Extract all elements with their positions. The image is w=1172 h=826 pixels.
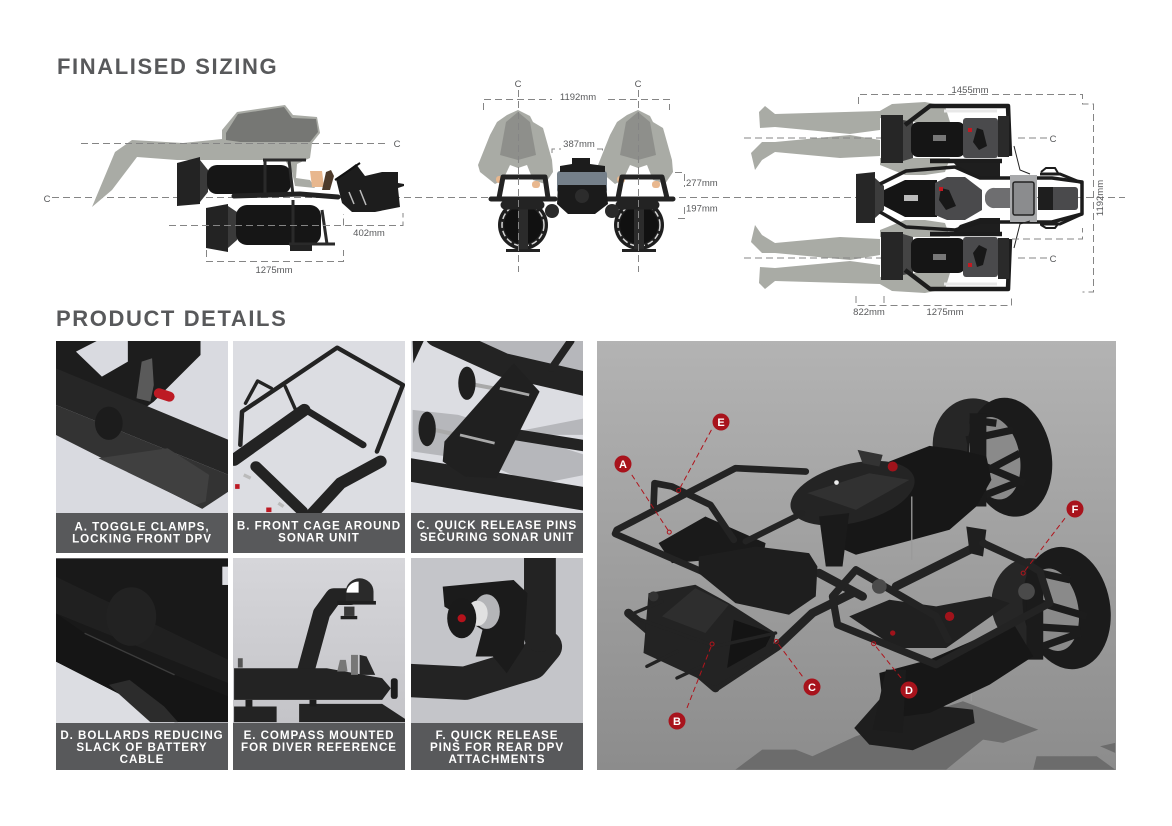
marker C: C <box>808 682 816 694</box>
photo: quick release pins <box>410 335 590 500</box>
dimensions: top view: C <box>1050 134 1057 145</box>
machinery inside rear frame <box>849 596 1010 648</box>
dimensions: side view: 402mm <box>353 228 385 239</box>
upper thruster and diver, top <box>751 102 1010 177</box>
foot plate <box>854 700 975 750</box>
leader lines <box>632 430 1065 708</box>
panel F: rear pins <box>410 557 583 770</box>
rear thruster, lower <box>992 546 1111 670</box>
dimensions: side view <box>44 139 403 276</box>
dimensions: top view: 1275mm <box>927 307 964 318</box>
caption: B. FRONT CAGE AROUND <box>237 520 401 532</box>
marker F <box>1066 500 1084 518</box>
sonar unit, top <box>1010 168 1082 228</box>
caption: SONAR UNIT <box>278 532 360 544</box>
machinery inside front frame <box>659 516 766 563</box>
photo: front cage <box>234 348 403 513</box>
heading: product details: PRODUCT DETAILS <box>56 306 287 331</box>
caption <box>411 723 583 770</box>
left thruster, front <box>498 200 548 252</box>
lower pylon <box>879 670 892 700</box>
main panel: product render <box>597 341 1120 770</box>
hands <box>496 176 660 188</box>
dimensions: front view: 277mm <box>686 178 718 189</box>
marker B: B <box>673 716 681 728</box>
frames, front <box>491 177 673 199</box>
dimensions: top view: 1455mm <box>952 85 989 96</box>
product render drawing <box>615 391 1120 770</box>
caption: E. COMPASS MOUNTED <box>244 729 394 742</box>
frame tube, side <box>234 194 338 197</box>
caption <box>233 513 405 553</box>
caption: FOR DIVER REFERENCE <box>241 741 397 754</box>
dimensions: side view: 1275mm <box>256 265 293 276</box>
side view drawing <box>92 105 404 252</box>
caption: C. QUICK RELEASE PINS <box>417 519 577 532</box>
marker E: E <box>717 417 725 429</box>
dimensions: front view: C <box>515 79 522 90</box>
hand <box>310 171 324 187</box>
top view drawing <box>751 102 1082 293</box>
caption: SECURING SONAR UNIT <box>420 531 574 544</box>
caption <box>233 723 405 770</box>
sonar unit, side <box>335 163 404 212</box>
caption <box>411 513 583 553</box>
caption <box>56 723 228 770</box>
dimensions: front view: 387mm <box>563 139 595 150</box>
dimension line: global centre line C <box>52 196 1125 198</box>
dimensions: front view: 1192mm <box>560 92 596 103</box>
photo: bollard <box>56 558 229 722</box>
centre white bay <box>982 180 1010 216</box>
panel C: quick release pins <box>410 335 590 553</box>
dimensions: top view: C <box>1050 254 1057 265</box>
dimensions: front view: 197mm <box>686 204 718 214</box>
marker F: F <box>1072 504 1079 516</box>
panel A: toggle clamps <box>56 341 229 553</box>
marker D <box>900 682 918 698</box>
caption: ATTACHMENTS <box>449 753 545 766</box>
diver silhouette, side <box>92 105 320 207</box>
plate, upper thruster <box>790 450 914 525</box>
heading: finalised sizing: FINALISED SIZING <box>57 54 278 79</box>
diver details, front <box>500 112 656 160</box>
photo: rear pins <box>410 557 545 683</box>
marker D: D <box>905 685 913 697</box>
cables <box>1014 146 1030 248</box>
diver tank, side <box>226 107 318 142</box>
caption: SLACK OF BATTERY <box>76 741 208 754</box>
sonar unit, front <box>545 158 619 218</box>
marker B <box>668 712 686 730</box>
dimensions: side view: C <box>394 139 401 150</box>
rear thruster, upper <box>932 398 1052 517</box>
dimensions: side view: C <box>44 194 51 205</box>
marker A: A <box>619 459 627 471</box>
ground shadow <box>735 701 1115 770</box>
dimensions: front view <box>484 79 718 272</box>
panel D: bollards <box>56 558 229 770</box>
divers, front <box>478 110 673 184</box>
marker E <box>712 414 730 430</box>
caption: CABLE <box>120 753 164 766</box>
caption: A. TOGGLE CLAMPS, <box>74 520 210 534</box>
caption: F. QUICK RELEASE <box>436 729 558 742</box>
sonar unit <box>630 585 776 686</box>
centre thruster, top <box>856 167 1082 230</box>
dimensions: top view: 822mm <box>853 307 885 318</box>
right thruster, front <box>614 200 664 252</box>
panel B: front cage <box>233 341 405 553</box>
caption: PINS FOR REAR DPV <box>430 741 564 754</box>
lower frame tubes <box>832 543 1050 665</box>
front view drawing <box>478 110 673 252</box>
body, lower thruster <box>879 626 1028 706</box>
support rod <box>911 496 912 540</box>
marker A <box>614 456 632 472</box>
photo: toggle clamp <box>56 341 229 509</box>
caption: D. BOLLARDS REDUCING <box>60 729 224 742</box>
upper thruster <box>177 157 306 206</box>
central tubes <box>628 543 983 688</box>
dimensions: top view <box>744 85 1106 318</box>
caption: LOCKING FRONT DPV <box>72 532 212 546</box>
panel E: compass <box>233 558 406 770</box>
front frame tubes <box>615 468 806 573</box>
dimensions: top view: 1192mm <box>1095 180 1106 216</box>
lower thruster <box>206 200 335 252</box>
dimensions: front view: C <box>635 79 642 90</box>
lower thruster and diver, top <box>751 218 1010 293</box>
photo: compass <box>234 578 406 722</box>
body, upper thruster <box>829 446 991 555</box>
pylon, upper thruster <box>819 513 849 566</box>
marker C <box>804 678 820 696</box>
front thruster <box>699 546 817 615</box>
caption <box>56 513 228 553</box>
